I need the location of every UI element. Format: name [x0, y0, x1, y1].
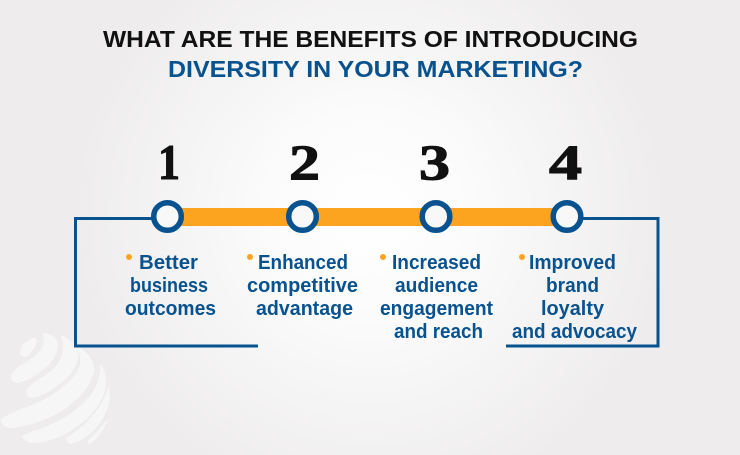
left frame line: [76, 218, 258, 346]
text: better business outcomes: Better: [139, 252, 198, 274]
number 1: 1: [158, 134, 180, 190]
text: enhanced competitive advantage: [247, 252, 358, 320]
title: [103, 26, 638, 82]
text: improved brand loyalty and advocacy: [512, 252, 638, 343]
text: better business outcomes: outcomes: [125, 298, 216, 320]
timeline node 4: [553, 203, 581, 230]
orange timeline bar: [168, 208, 567, 226]
text: better business outcomes: [125, 252, 216, 320]
bullet 4: [519, 254, 525, 260]
step 2: [247, 134, 358, 320]
text: enhanced competitive advantage: competitive: [247, 275, 358, 297]
step 1: [125, 134, 216, 320]
text: improved brand loyalty and advocacy: loyalty: [541, 298, 605, 320]
number 4: 4: [549, 134, 582, 190]
number 3: 3: [419, 134, 450, 190]
text: increased audience engagement and reach: audience: [395, 275, 478, 297]
text: increased audience engagement and reach: [380, 252, 493, 343]
text: increased audience engagement and reach: Increased: [392, 252, 481, 274]
step 4: [512, 134, 638, 343]
title: DIVERSITY IN YOUR MARKETING?: [168, 56, 583, 82]
bullet 3: [380, 254, 386, 260]
icon: faded globe watermark: [1, 332, 110, 445]
bullet 1: [126, 254, 132, 260]
text: increased audience engagement and reach: and reach: [394, 321, 483, 343]
text: better business outcomes: business: [130, 275, 208, 297]
title: WHAT ARE THE BENEFITS OF INTRODUCING: [103, 26, 638, 52]
text: improved brand loyalty and advocacy: and advocacy: [512, 321, 638, 343]
timeline node 3: [422, 203, 450, 230]
step 3: [380, 134, 493, 343]
right frame line: [506, 218, 658, 346]
text: improved brand loyalty and advocacy: brand: [546, 275, 599, 297]
text: enhanced competitive advantage: Enhanced: [258, 252, 348, 274]
text: enhanced competitive advantage: advantage: [256, 298, 353, 320]
bullet 2: [247, 254, 253, 260]
timeline node 2: [289, 203, 316, 230]
text: improved brand loyalty and advocacy: Improved: [529, 252, 616, 274]
text: increased audience engagement and reach: engagement: [380, 298, 493, 320]
timeline node 1: [154, 203, 181, 230]
number 2: 2: [289, 134, 320, 190]
